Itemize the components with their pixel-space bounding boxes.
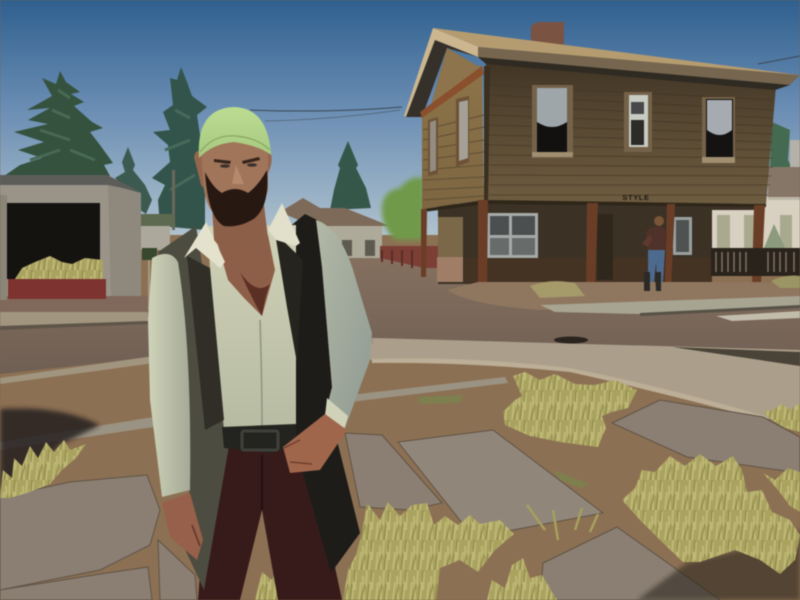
- roof: [433, 28, 800, 76]
- upper windows: [428, 85, 735, 176]
- shirt: [207, 225, 296, 430]
- belt: [222, 424, 296, 453]
- porch posts: [421, 200, 765, 292]
- upper siding: [486, 58, 776, 204]
- left sleeve: [148, 254, 190, 497]
- dark railing on the right: [711, 248, 800, 276]
- coat back left: [158, 226, 230, 590]
- chest skin: [216, 235, 275, 316]
- green tree and red fence: [380, 177, 438, 268]
- distant houses: [140, 198, 390, 310]
- grass tufts: [0, 372, 800, 600]
- cap: [199, 107, 271, 158]
- fascia beam: [420, 66, 484, 118]
- gable soffit: [405, 30, 478, 117]
- corner board: [484, 66, 490, 204]
- porch slab: [447, 282, 800, 310]
- manhole: [554, 336, 588, 344]
- foreground dirt and concrete sidewalk: [0, 338, 800, 490]
- left lapel: [187, 256, 224, 430]
- neck: [212, 205, 268, 270]
- back tree and house on the right: [712, 122, 800, 257]
- far sidewalk: [0, 296, 800, 330]
- ground floor: [437, 204, 764, 284]
- right sleeve: [316, 220, 372, 428]
- foreground man: [148, 107, 372, 600]
- power lines: [250, 56, 800, 121]
- pine trees left: [4, 67, 371, 230]
- paving stones: [0, 400, 800, 600]
- chimney: [531, 22, 564, 46]
- sky: [0, 0, 800, 240]
- shed on the left: [0, 175, 141, 300]
- trousers: [198, 440, 342, 600]
- eyes and brows: [214, 157, 260, 164]
- beard: [205, 170, 268, 226]
- right hand: [283, 414, 347, 473]
- ground and road: [0, 235, 800, 600]
- left hand: [162, 493, 203, 560]
- coat right: [288, 214, 360, 573]
- person on the porch: [642, 216, 667, 291]
- two-storey wooden house: [404, 22, 800, 310]
- porch sign: STYLE: [622, 193, 650, 202]
- right lapel and collar: [275, 233, 303, 363]
- grass near porch and right edge: [530, 276, 800, 298]
- head: [194, 107, 272, 226]
